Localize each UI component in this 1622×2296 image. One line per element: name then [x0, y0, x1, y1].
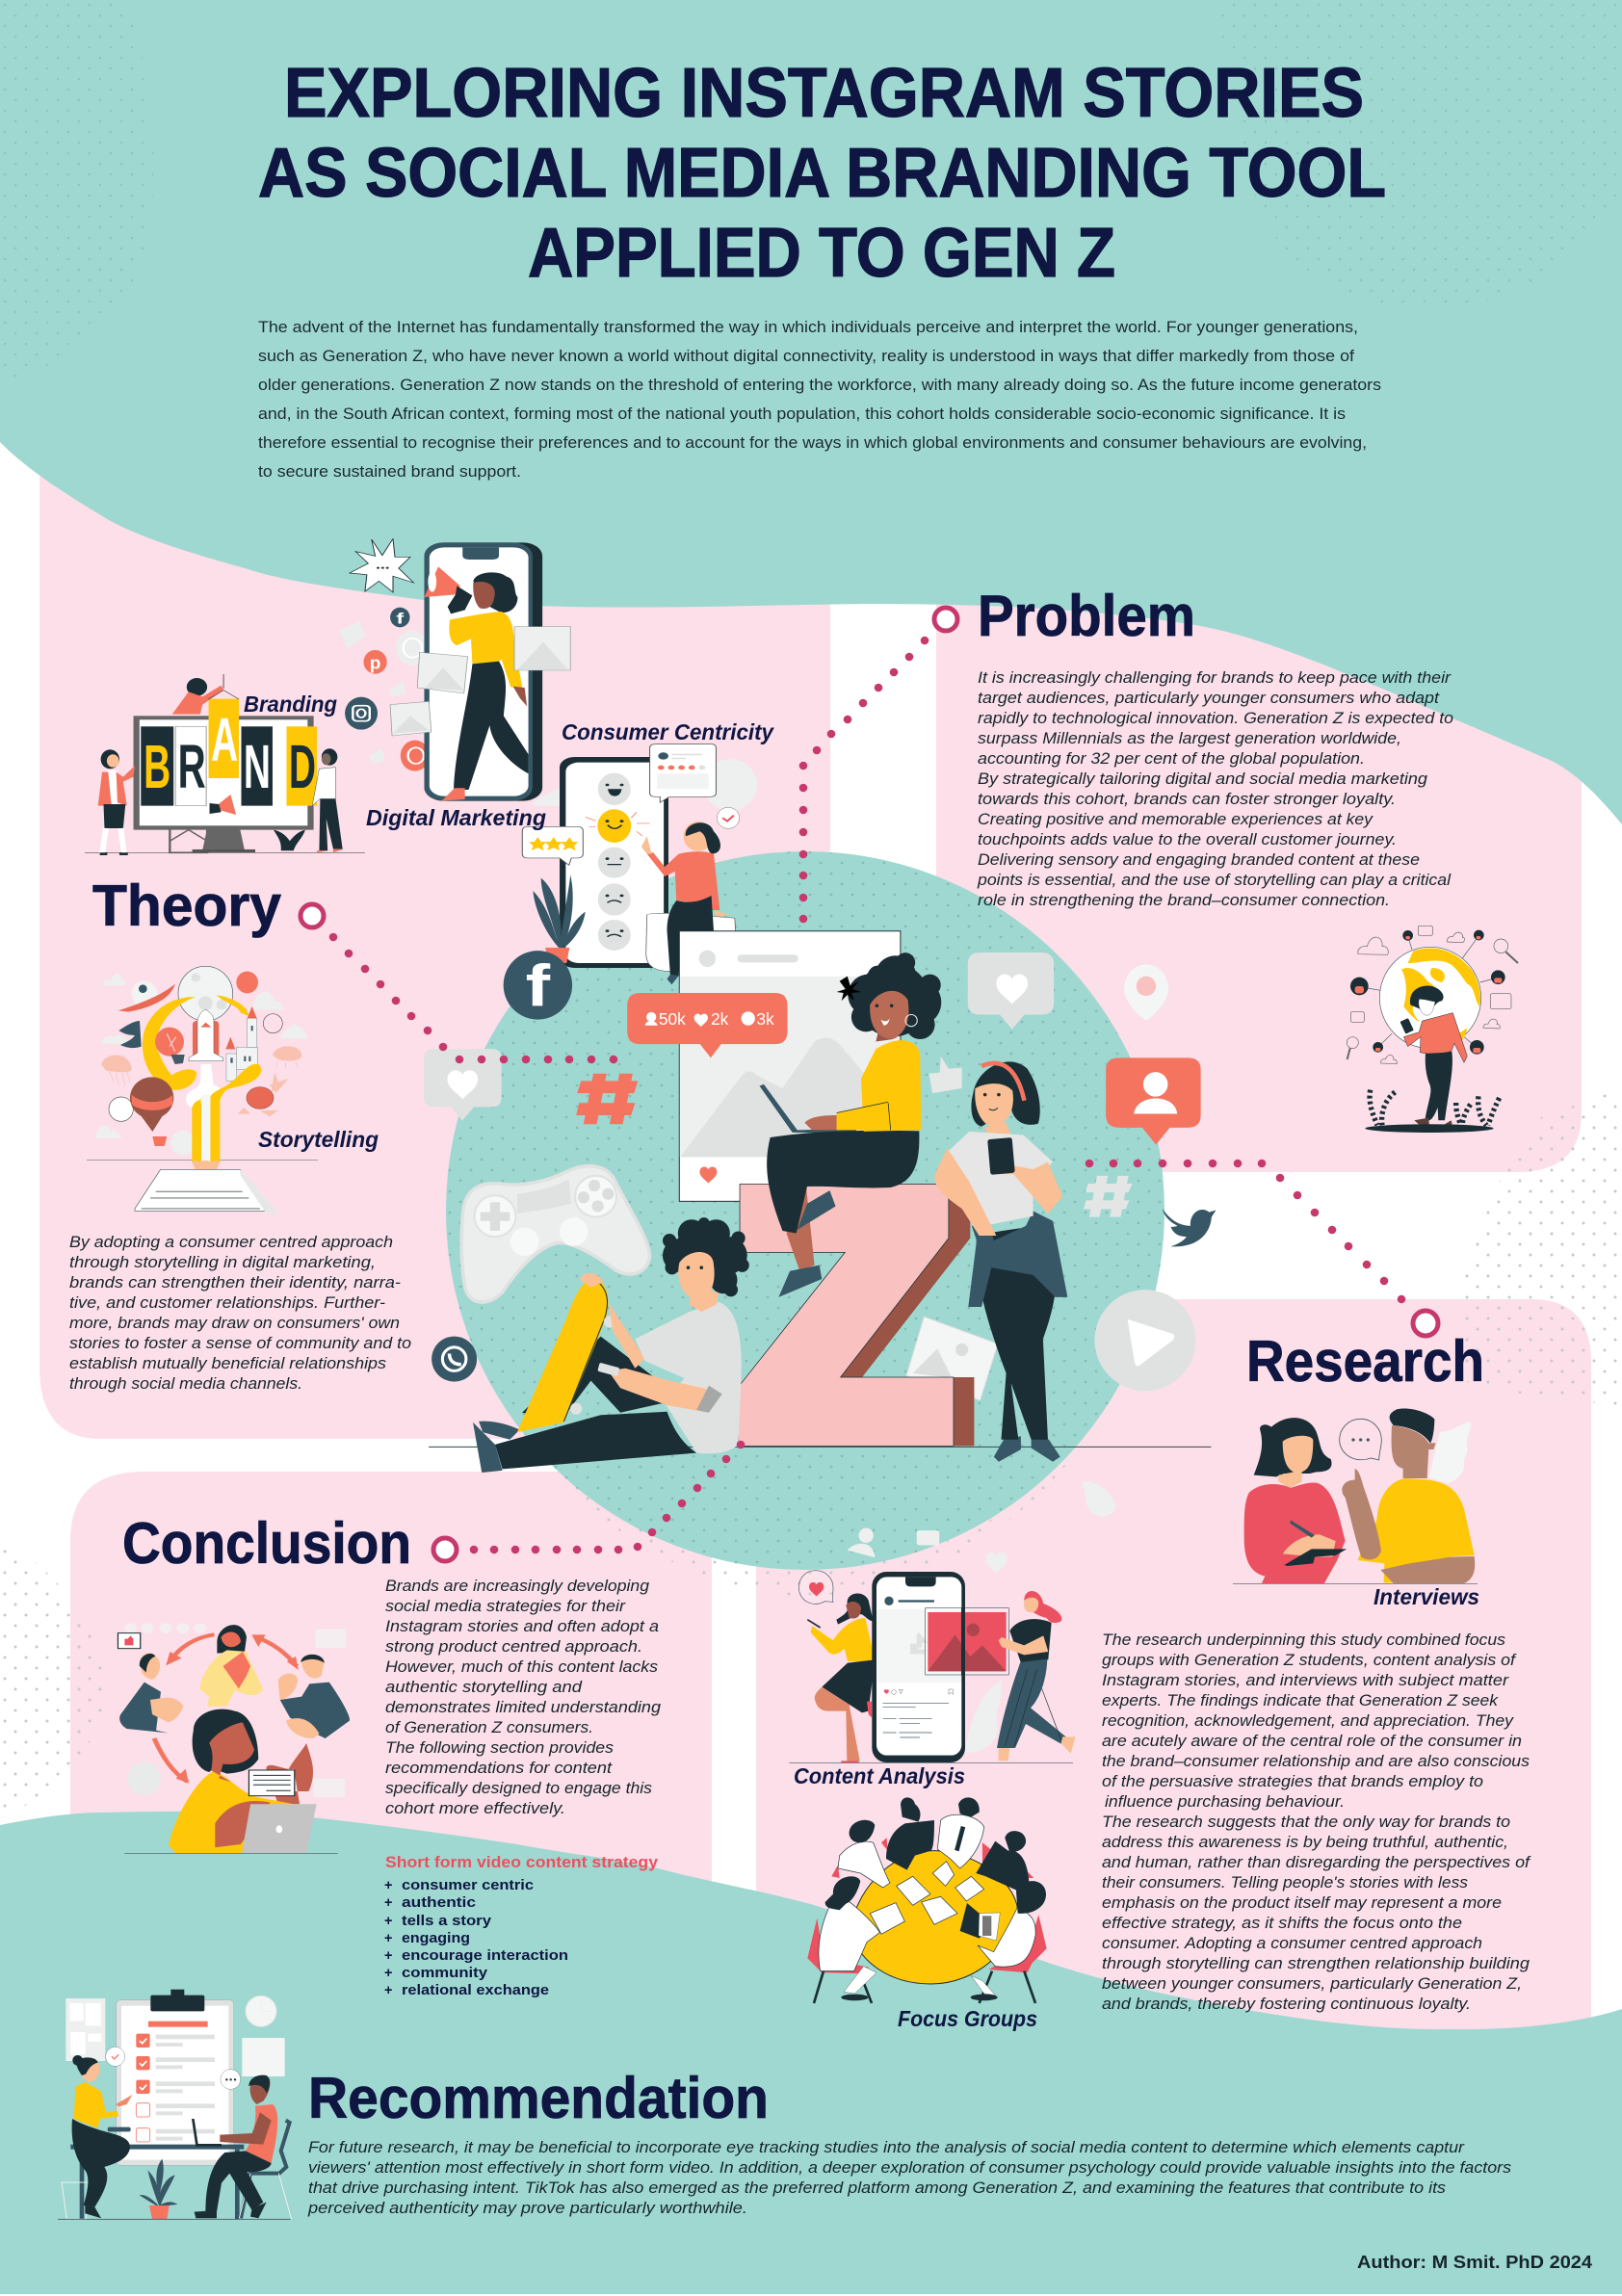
central illustration — [424, 931, 1216, 1573]
problem text: surpass Millennials as the largest generation worldwide, — [978, 730, 1401, 747]
conclusion text: specifically designed to engage this — [385, 1780, 652, 1797]
conclusion text: cohort more effectively. — [385, 1800, 565, 1817]
theory text: brands can strengthen their identity, narra- — [69, 1274, 402, 1292]
checkmark bubble — [717, 807, 740, 828]
illustration: focus groups — [807, 1797, 1047, 2003]
teal footer wave — [0, 1812, 1622, 2294]
pale decorations below figure — [848, 1481, 1115, 1573]
illustration: brand billboard: N — [244, 732, 271, 801]
research text: consumer. Adopting a consumer centred approach — [1102, 1935, 1482, 1952]
icon: social media bubbles: p — [370, 653, 380, 673]
label: Storytelling: Storytelling — [258, 1127, 379, 1152]
problem text: points is essential, and the use of storytelling can play a critical — [977, 872, 1452, 889]
recommendation text: perceived authenticity may prove particularly worthwhile. — [307, 2200, 747, 2217]
recommendation text: that drive purchasing intent. TikTok has also emerged as the preferred platform among Generation Z, and examining the features that contribute to its — [308, 2179, 1446, 2197]
short form video strategy heading: Short form video content strategy — [385, 1853, 659, 1871]
problem text: It is increasingly challenging for brands to keep pace with their — [978, 669, 1452, 687]
arrows — [154, 1634, 297, 1782]
illustration: recommendation checklist — [58, 1990, 292, 2219]
heading: Recommendation: Recommendation — [308, 2066, 769, 2130]
research text: through storytelling can strengthen relationship building — [1102, 1955, 1530, 1972]
conclusion text: However, much of this content lacks — [385, 1658, 658, 1676]
woman holding photo — [997, 1591, 1076, 1761]
woman with tablet — [72, 2055, 132, 2218]
pale dotted crescent under circle — [520, 1425, 1088, 1597]
icon: hash grey — [1084, 1176, 1133, 1217]
connector dots — [329, 637, 1405, 1553]
problem text: Delivering sensory and engaging branded content at these — [978, 851, 1420, 869]
research text: recognition, acknowledgement, and appreciation. They — [1102, 1712, 1515, 1730]
illustration: brand billboard — [85, 674, 365, 854]
illustration: brand billboard: D — [289, 732, 316, 801]
heart bubble — [798, 1571, 833, 1604]
problem text: touchpoints adds value to the overall customer journey. — [978, 831, 1397, 848]
girl with yellow top — [807, 1594, 875, 1763]
label: Consumer Centricity: Consumer Centricity — [562, 719, 774, 744]
papers — [870, 1862, 984, 1934]
research text: address this awareness is by being truthful, authentic, — [1102, 1834, 1508, 1851]
strategy list: tells a story — [402, 1914, 491, 1929]
people around table — [819, 1797, 1046, 1971]
title — [258, 55, 1386, 292]
strategy list: + — [384, 1983, 392, 1998]
icon: coral profile bubble — [1106, 1057, 1201, 1145]
research text: their consumers. Telling people's stories with less — [1102, 1874, 1468, 1892]
research text: and brands, thereby fostering continuous loyalty. — [1102, 1996, 1471, 2013]
theory text: stories to foster a sense of community and to — [69, 1335, 411, 1352]
theory text: through social media channels. — [69, 1375, 302, 1393]
illustration: brand billboard: R — [178, 732, 206, 801]
checklist items — [136, 2034, 215, 2142]
photo cards — [390, 627, 570, 736]
problem text: accounting for 32 per cent of the global population. — [978, 750, 1365, 768]
problem text: role in strengthening the brand–consumer connection. — [978, 892, 1390, 909]
red photo card — [926, 1607, 1008, 1675]
recommendation text: For future research, it may be beneficial to incorporate eye tracking studies into the analysis of social media content to determine which elements captur — [308, 2139, 1466, 2156]
problem text: target audiences, particularly younger consumers who adapt — [978, 690, 1441, 707]
intro paragraph: older generations. Generation Z now stands on the threshold of entering the workforce, with many already doing so. As the future income generators — [258, 376, 1381, 394]
icon: twitter bird — [1163, 1209, 1216, 1246]
icon: thumbs up — [929, 1057, 962, 1093]
intro paragraph: to secure sustained brand support. — [258, 462, 521, 481]
panel: theory background — [39, 424, 830, 1439]
strategy list: engaging — [402, 1931, 470, 1946]
outline clouds and bubbles — [1347, 926, 1518, 1064]
icon: whatsapp — [432, 1337, 477, 1382]
wall notes — [65, 1996, 285, 2076]
pencil with yellow ribbon — [192, 1064, 262, 1188]
stats bubble: 2k — [711, 1009, 729, 1029]
dot texture top right — [1220, 0, 1622, 311]
conclusion text: demonstrates limited understanding — [385, 1699, 662, 1716]
ufo — [118, 980, 175, 1012]
illustration: content analysis — [789, 1571, 1076, 1763]
strategy list: community — [402, 1966, 487, 1981]
conclusion text: recommendations for content — [385, 1760, 614, 1777]
woman sitting on Z — [759, 952, 941, 1297]
top-left illustrations: branding, digital marketing, consumer centricity — [85, 538, 757, 984]
recommendation text — [307, 2139, 1511, 2217]
globe — [1379, 947, 1481, 1049]
leaf — [1428, 1422, 1471, 1483]
table — [850, 1851, 1018, 1984]
conclusion text: authentic storytelling and — [385, 1679, 583, 1696]
dot texture top left — [0, 0, 153, 380]
heading: Theory: Theory — [92, 874, 282, 938]
author credit: Author: M Smit. PhD 2024 — [1357, 2253, 1592, 2272]
icon: thumbs up note — [118, 1633, 141, 1649]
jellyfish — [101, 1046, 301, 1072]
strategy list — [384, 1878, 568, 1998]
icon: facebook — [504, 951, 572, 1020]
woman centre — [199, 1625, 263, 1707]
problem text: rapidly to technological innovation. Generation Z is expected to — [978, 710, 1453, 727]
research text: The research underpinning this study combined focus — [1102, 1631, 1505, 1649]
conclusion text: Brands are increasingly developing — [385, 1578, 650, 1595]
castle — [217, 995, 257, 1081]
clipboard — [117, 1990, 234, 2165]
notebook — [135, 1169, 278, 1213]
title: EXPLORING INSTAGRAM STORIES — [284, 55, 1364, 132]
woman on top of billboard — [172, 674, 239, 715]
pale stars and chat — [124, 1623, 346, 1797]
balloon — [130, 1077, 173, 1146]
theory text: through storytelling in digital marketing, — [69, 1254, 376, 1271]
strategy list: + — [384, 1914, 392, 1929]
conclusion text — [385, 1578, 662, 1817]
big letter Z — [739, 1184, 974, 1446]
person with phone — [1400, 986, 1467, 1130]
man left — [119, 1654, 184, 1733]
connector rings — [301, 608, 1438, 1561]
research text: emphasis on the product itself may represent a more — [1102, 1894, 1502, 1912]
research text: effective strategy, as it shifts the focus onto the — [1102, 1915, 1462, 1932]
conclusion text: of Generation Z consumers. — [385, 1719, 593, 1736]
chairs — [807, 1838, 1047, 1973]
rocket — [189, 1009, 223, 1061]
teal header wave — [0, 0, 1622, 824]
label: Branding: Branding — [244, 691, 337, 717]
icon: social media bubbles: f — [396, 611, 405, 627]
heading: Conclusion: Conclusion — [122, 1511, 411, 1576]
icon: heart bubble right — [968, 952, 1054, 1030]
ground line — [429, 1446, 1211, 1448]
intro paragraph: The advent of the Internet has fundamentally transformed the way in which individuals perceive and interpret the world. For younger generations, — [258, 318, 1358, 336]
central teal circle — [446, 851, 1164, 1570]
stats bubble: 50k — [659, 1009, 686, 1029]
icon: heart bubble left — [424, 1049, 502, 1121]
background pattern right side — [1460, 1088, 1622, 1406]
conclusion text: The following section provides — [385, 1739, 614, 1757]
woman in yellow at laptop — [169, 1709, 317, 1853]
recommendation text: viewers' attention most effectively in short form video. In addition, a deeper exploration of consumer psychology could provide valuable insights into the factors — [308, 2159, 1511, 2177]
intro paragraph — [258, 318, 1381, 481]
stats bubble — [627, 993, 788, 1057]
problem text: towards this cohort, brands can foster stronger loyalty. — [978, 791, 1396, 808]
heading: Research: Research — [1246, 1329, 1484, 1394]
plants — [1370, 1090, 1500, 1125]
research text: are acutely aware of the central role of the consumer in — [1102, 1733, 1522, 1750]
icon: game controller — [461, 1166, 650, 1302]
label: Digital Marketing: Digital Marketing — [366, 805, 546, 830]
icon: social media bubbles — [339, 608, 430, 771]
strategy list: relational exchange — [402, 1983, 549, 1998]
illustration: interviews — [1233, 1408, 1478, 1583]
ground ellipse — [1365, 1124, 1494, 1133]
intro paragraph: such as Generation Z, who have never known a world without digital connectivity, reality is understood in ways that differ markedly from those of — [258, 347, 1354, 365]
theory text: more, brands may draw on consumers' own — [69, 1315, 400, 1332]
man right — [278, 1655, 350, 1738]
legs and shoes — [841, 1967, 998, 2000]
speech bubble — [1340, 1419, 1381, 1460]
speech bubbles — [106, 2047, 241, 2089]
research text — [1102, 1631, 1532, 2013]
icon: speech burst — [350, 538, 413, 592]
research text: and human, rather than disregarding the perspectives of — [1102, 1854, 1532, 1871]
research text: the brand–consumer relationship and are also conscious — [1102, 1753, 1530, 1770]
theory text: tive, and customer relationships. Further- — [69, 1294, 386, 1312]
illustration: brand billboard: B — [144, 732, 170, 801]
panel: problem background — [936, 578, 1582, 1172]
icon group: storytelling illustration — [87, 966, 318, 1213]
label: Focus Groups: Focus Groups — [898, 2006, 1037, 2031]
research text: groups with Generation Z students, content analysis of — [1102, 1652, 1518, 1669]
problem text: By strategically tailoring digital and social media marketing — [978, 770, 1428, 788]
label: Interviews: Interviews — [1373, 1584, 1479, 1609]
panel: conclusion background — [70, 1472, 712, 1926]
person nodes — [1350, 930, 1505, 1055]
tilted picture card — [906, 1317, 998, 1400]
boy sitting with skateboard — [473, 1217, 749, 1473]
strategy list: + — [384, 1966, 392, 1981]
intro paragraph: and, in the South African context, forming most of the national youth population, this cohort holds considerable socio-economic significance. It is — [258, 404, 1346, 423]
phone — [872, 1572, 965, 1762]
strategy list: authentic — [402, 1895, 476, 1911]
illustration: emoji rating phone — [522, 744, 757, 984]
rocket trail cloud — [186, 1064, 222, 1108]
title: AS SOCIAL MEDIA BRANDING TOOL — [258, 135, 1386, 212]
woman with notebook — [1244, 1418, 1347, 1583]
ground line — [87, 1159, 318, 1161]
illustration: brand billboard: A — [211, 705, 238, 774]
illustration: globe with connected people — [1347, 926, 1518, 1133]
man at laptop — [192, 2075, 292, 2219]
research text: influence purchasing behaviour. — [1105, 1793, 1345, 1811]
network connectors — [1368, 936, 1498, 1047]
title: APPLIED TO GEN Z — [528, 215, 1115, 292]
planet — [236, 972, 258, 993]
strategy list: + — [384, 1931, 392, 1946]
desk — [70, 2145, 244, 2219]
problem text — [977, 669, 1453, 909]
illustration: conclusion discussion — [118, 1623, 350, 1853]
strategy list: encourage interaction — [402, 1948, 568, 1964]
theory text: By adopting a consumer centred approach — [69, 1234, 393, 1251]
research text: The research suggests that the only way for brands to — [1102, 1813, 1510, 1831]
leaf behind phone — [965, 1681, 1002, 1753]
woman left of billboard — [98, 749, 135, 854]
plant and pot — [533, 874, 586, 963]
icon: location pin — [1124, 964, 1168, 1021]
strategy list: + — [384, 1948, 392, 1964]
man pointing — [1342, 1408, 1475, 1583]
light bulb — [155, 1028, 185, 1064]
woman pointing at phone — [641, 822, 736, 984]
review card bubble — [650, 744, 716, 802]
conclusion text: Instagram stories and often adopt a — [385, 1618, 659, 1635]
strategy list: + — [384, 1895, 392, 1911]
research text: between younger consumers, particularly Generation Z, — [1102, 1975, 1522, 1993]
research text: experts. The findings indicate that Generation Z seek — [1102, 1692, 1499, 1709]
stars bubble — [522, 826, 583, 865]
post card — [679, 931, 901, 1201]
panel: research background — [756, 1299, 1591, 2061]
theory text — [69, 1234, 411, 1393]
icon: hash coral — [576, 1074, 638, 1124]
icon: facebook: f — [526, 952, 551, 1018]
yellow swirl left — [143, 997, 196, 1090]
pale clouds and bubbles — [94, 974, 308, 1155]
theory text: establish mutually beneficial relationships — [69, 1355, 386, 1372]
conclusion text: social media strategies for their — [385, 1598, 627, 1615]
problem text: Creating positive and memorable experiences at key — [978, 811, 1374, 828]
moon — [178, 966, 233, 1021]
heading: Problem: Problem — [978, 584, 1195, 648]
man right of billboard — [312, 748, 344, 852]
research text: Instagram stories, and interviews with subject matter — [1102, 1672, 1510, 1689]
label: Content Analysis: Content Analysis — [794, 1763, 965, 1788]
strategy list: + — [384, 1878, 392, 1893]
trash bin — [62, 2182, 90, 2219]
background pattern left side — [0, 1541, 106, 1820]
turtle — [238, 1072, 288, 1116]
plant — [142, 2159, 175, 2219]
research text: of the persuasive strategies that brands employ to — [1102, 1773, 1483, 1790]
icon: play button — [1094, 1290, 1196, 1391]
intro paragraph: therefore essential to recognise their preferences and to account for the ways in which global environments and consumer behaviours are evolving, — [258, 433, 1367, 452]
strategy list: consumer centric — [402, 1878, 534, 1893]
stats bubble: 3k — [756, 1009, 774, 1029]
laptop — [960, 1903, 1000, 1941]
illustration: phone with megaphone woman — [424, 542, 542, 801]
conclusion text: strong product centred approach. — [385, 1638, 642, 1656]
leaves — [118, 1021, 142, 1048]
woman standing with phone — [934, 1061, 1067, 1462]
